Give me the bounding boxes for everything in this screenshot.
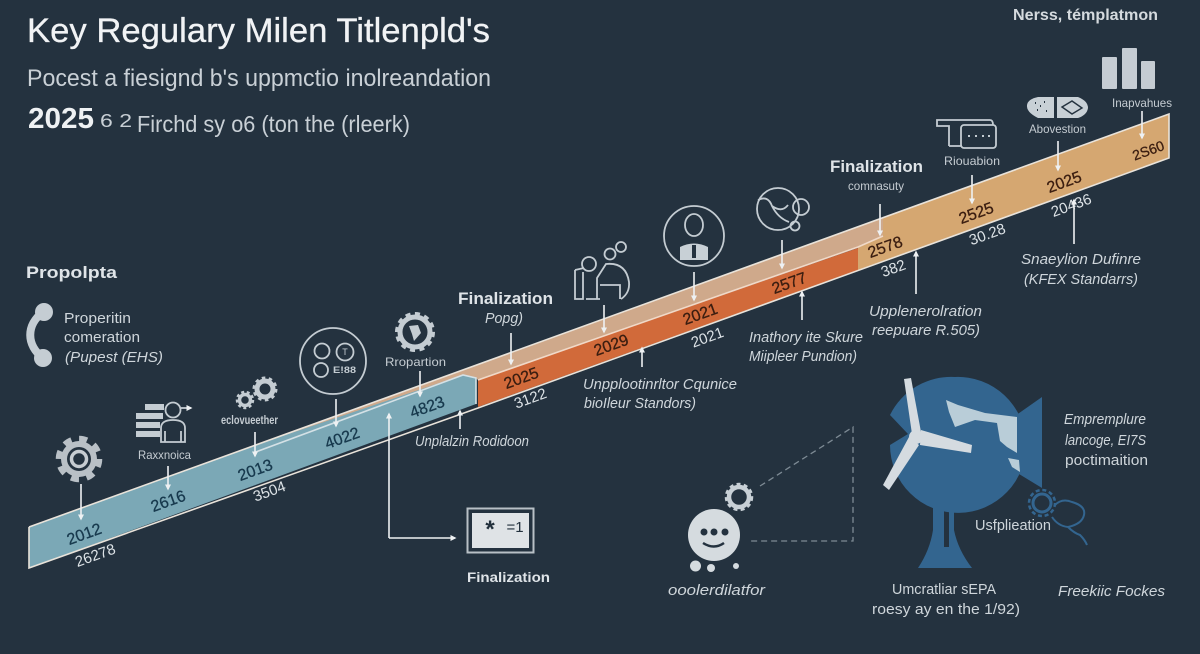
callout: inathory: Miipleer Pundion) [749,348,857,365]
callout: empremplure: poctimaition [1065,452,1148,469]
callout: upplenerolration [869,303,982,339]
icon: two gears [237,378,276,408]
icon: circle with symbols: E!88 [333,365,356,375]
left text block: comeration [64,329,140,346]
top right note: Nerss, témplatmon [1013,7,1158,24]
heading: finalization: Finalization [458,289,553,308]
secondary numbers below ribbon: 20436 [1049,191,1094,221]
label: inapvahues: Inapvahues [1112,96,1172,110]
icon: blue cog and clouds [1029,490,1087,545]
icon: gear [59,439,99,479]
icon: message card [937,120,996,148]
callout: upplenerolration: reepuare R.505) [872,322,980,339]
icon: circle with symbols [300,328,366,394]
arrows to ribbon [81,111,1142,519]
icon: figures [575,242,629,299]
date line: Firchd sy o6 (ton the (rleerk) [137,111,410,137]
icon: gear small [726,484,752,510]
icon: chat bubble [688,509,740,572]
icon: finalization box: =1 [506,519,524,536]
left text block: (Pupest (EHS) [65,349,163,366]
year labels on orange segment: 2029 [592,332,631,360]
label: comnasuty: comnasuty [848,179,904,193]
year labels on tan segment [866,137,1167,262]
icon: circle with symbols: T [342,347,348,357]
secondary numbers below ribbon: 26278 [73,541,118,571]
callout: inathory: Inathory ite Skure [749,329,863,346]
ribbon: tan right segment [858,114,1169,270]
icon: phone handset [30,303,53,367]
icon: finalization box: * [485,516,495,543]
ribbon: tan upper band [253,218,883,452]
callout: snaeylion: (KFEX Standarrs) [1024,271,1138,288]
icon: handshake [1027,97,1088,118]
callout: unplalzin: Unplalzin Rodidoon [415,433,529,450]
left heading: Propolpta [26,263,118,282]
left text block: Properitin [64,310,131,327]
callout: unpplootinrltor: Unpplootinrltor Cqunice [583,376,737,393]
label: abovestion: Abovestion [1029,122,1086,136]
year labels on tan segment: 2S60 [1130,137,1167,163]
year labels on tan segment: 2025 [1045,169,1084,197]
secondary numbers below ribbon: 3122 [512,385,549,412]
heading: finalization upper: Finalization [830,157,923,176]
ribbon: orange segment [478,248,858,407]
callout: empremplure: Empremplure [1064,411,1146,428]
year labels on orange segment: 2025 [502,365,541,393]
secondary numbers below ribbon: 3504 [251,478,288,505]
secondary numbers below ribbon: 2021 [689,324,726,351]
year labels on tan segment: 2525 [957,200,996,228]
year labels on tan segment: 2578 [866,234,905,262]
icon: person in circle [664,206,724,266]
caption: umcratliar [872,581,1020,618]
label: gear with globe: Rropartion [385,355,446,369]
wedge [1015,397,1042,488]
callout: snaeylion [1021,251,1141,288]
turbine [883,378,972,490]
label: person: Raxxnoica [138,448,191,462]
year labels on blue segment: 4823 [408,394,447,422]
title: Key Regulary Milen Titlenpld's [27,12,490,50]
date line: 6 2 [100,111,132,131]
icon: finalization box [468,508,534,552]
callout: empremplure: lancoge, EI7S [1065,432,1146,449]
timeline ribbon [29,114,1169,568]
secondary numbers below ribbon: 382 [879,257,908,281]
label: gears: eclovueether [221,413,278,427]
date line: 2025 [28,103,94,135]
year labels on blue segment: 4022 [323,425,362,453]
ribbon: blue segment [29,375,476,568]
ribbon outlines [29,114,1169,568]
callout: unpplootinrltor [583,376,737,412]
dashed connector [749,427,853,541]
callout: snaeylion: Snaeylion Dufinre [1021,251,1141,268]
callout: unpplootinrltor: bioIleur Standors) [584,395,696,412]
year labels on orange segment [502,270,809,393]
year labels on blue segment: 2616 [149,488,188,516]
caption: umcratliar: roesy ay en the 1/92) [872,601,1020,618]
secondary numbers below ribbon: 30.28 [967,220,1008,249]
caption: umcratliar: Umcratliar sEPA [892,581,996,598]
left text block [64,310,163,366]
icon: person with list [136,402,191,442]
stand [918,505,972,568]
callout: upplenerolration: Upplenerolration [869,303,982,320]
year labels on orange segment: 2577 [770,270,809,298]
callout: empremplure [1064,411,1148,469]
icon: bar chart [1102,48,1155,89]
year labels on orange segment: 2021 [681,301,720,329]
caption: freekiic: Freekiic Fockes [1058,583,1165,600]
icon: gear with globe [397,314,433,350]
year labels on blue segment: 2013 [236,457,275,485]
globe [890,377,1026,513]
icon: network cloud [757,188,809,230]
label: usfplieation: Usfplieation [975,517,1051,534]
illustration: wind turbine globe [883,377,1042,568]
secondary numbers below ribbon [73,191,1094,571]
callout: inathory [749,329,863,365]
date line [28,103,410,137]
label: ooolerdilatfor: ooolerdilatfor [668,582,766,599]
subtitle: Pocest a fiesignd b's uppmctio inolreandation [27,65,491,92]
map shape [946,400,1017,453]
year labels on blue segment [65,394,447,549]
label: popg: Popg) [485,310,523,327]
label: riouabion: Riouabion [944,154,1000,168]
elbow arrow to finalization box [389,414,455,538]
year labels on blue segment: 2012 [65,521,104,549]
label: finalization box: Finalization [467,569,550,585]
